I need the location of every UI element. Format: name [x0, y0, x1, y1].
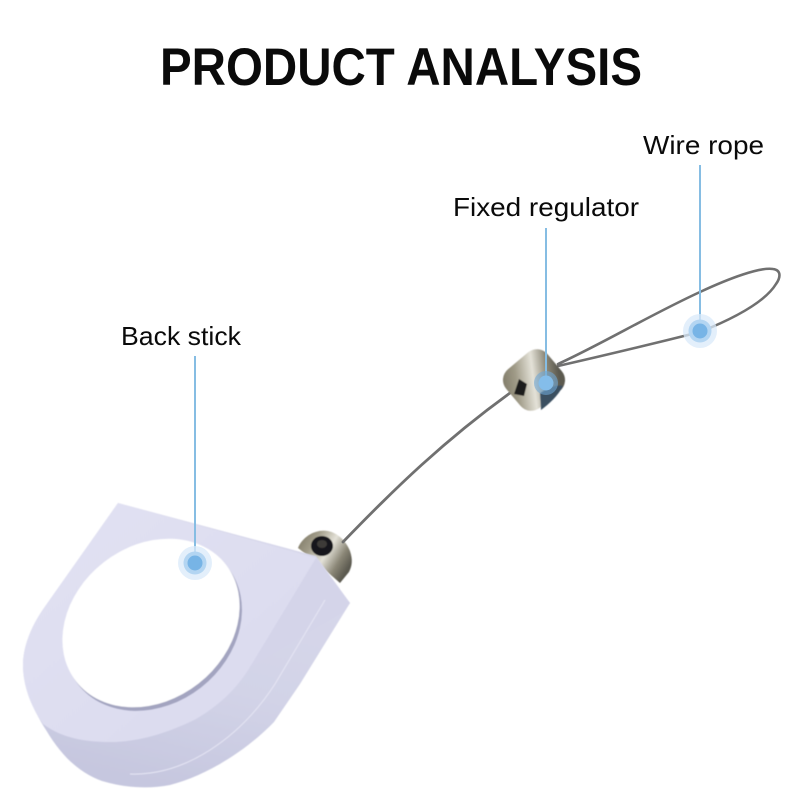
title: PRODUCT ANALYSIS: [160, 38, 642, 97]
fixed regulator cylinder: [497, 343, 571, 417]
white adhesive disc: [29, 504, 276, 746]
label: back stick: Back stick: [121, 321, 242, 351]
label: fixed regulator: Fixed regulator: [453, 192, 639, 222]
label: fixed regulator: [453, 192, 639, 395]
small screw nut at body: [298, 531, 352, 583]
label: wire rope: [643, 130, 764, 348]
wire rope: [343, 269, 779, 542]
label: wire rope: Wire rope: [643, 130, 764, 160]
label: back stick: [121, 321, 242, 580]
white plastic body: [23, 503, 350, 787]
product: retractable holder body: [23, 503, 352, 787]
